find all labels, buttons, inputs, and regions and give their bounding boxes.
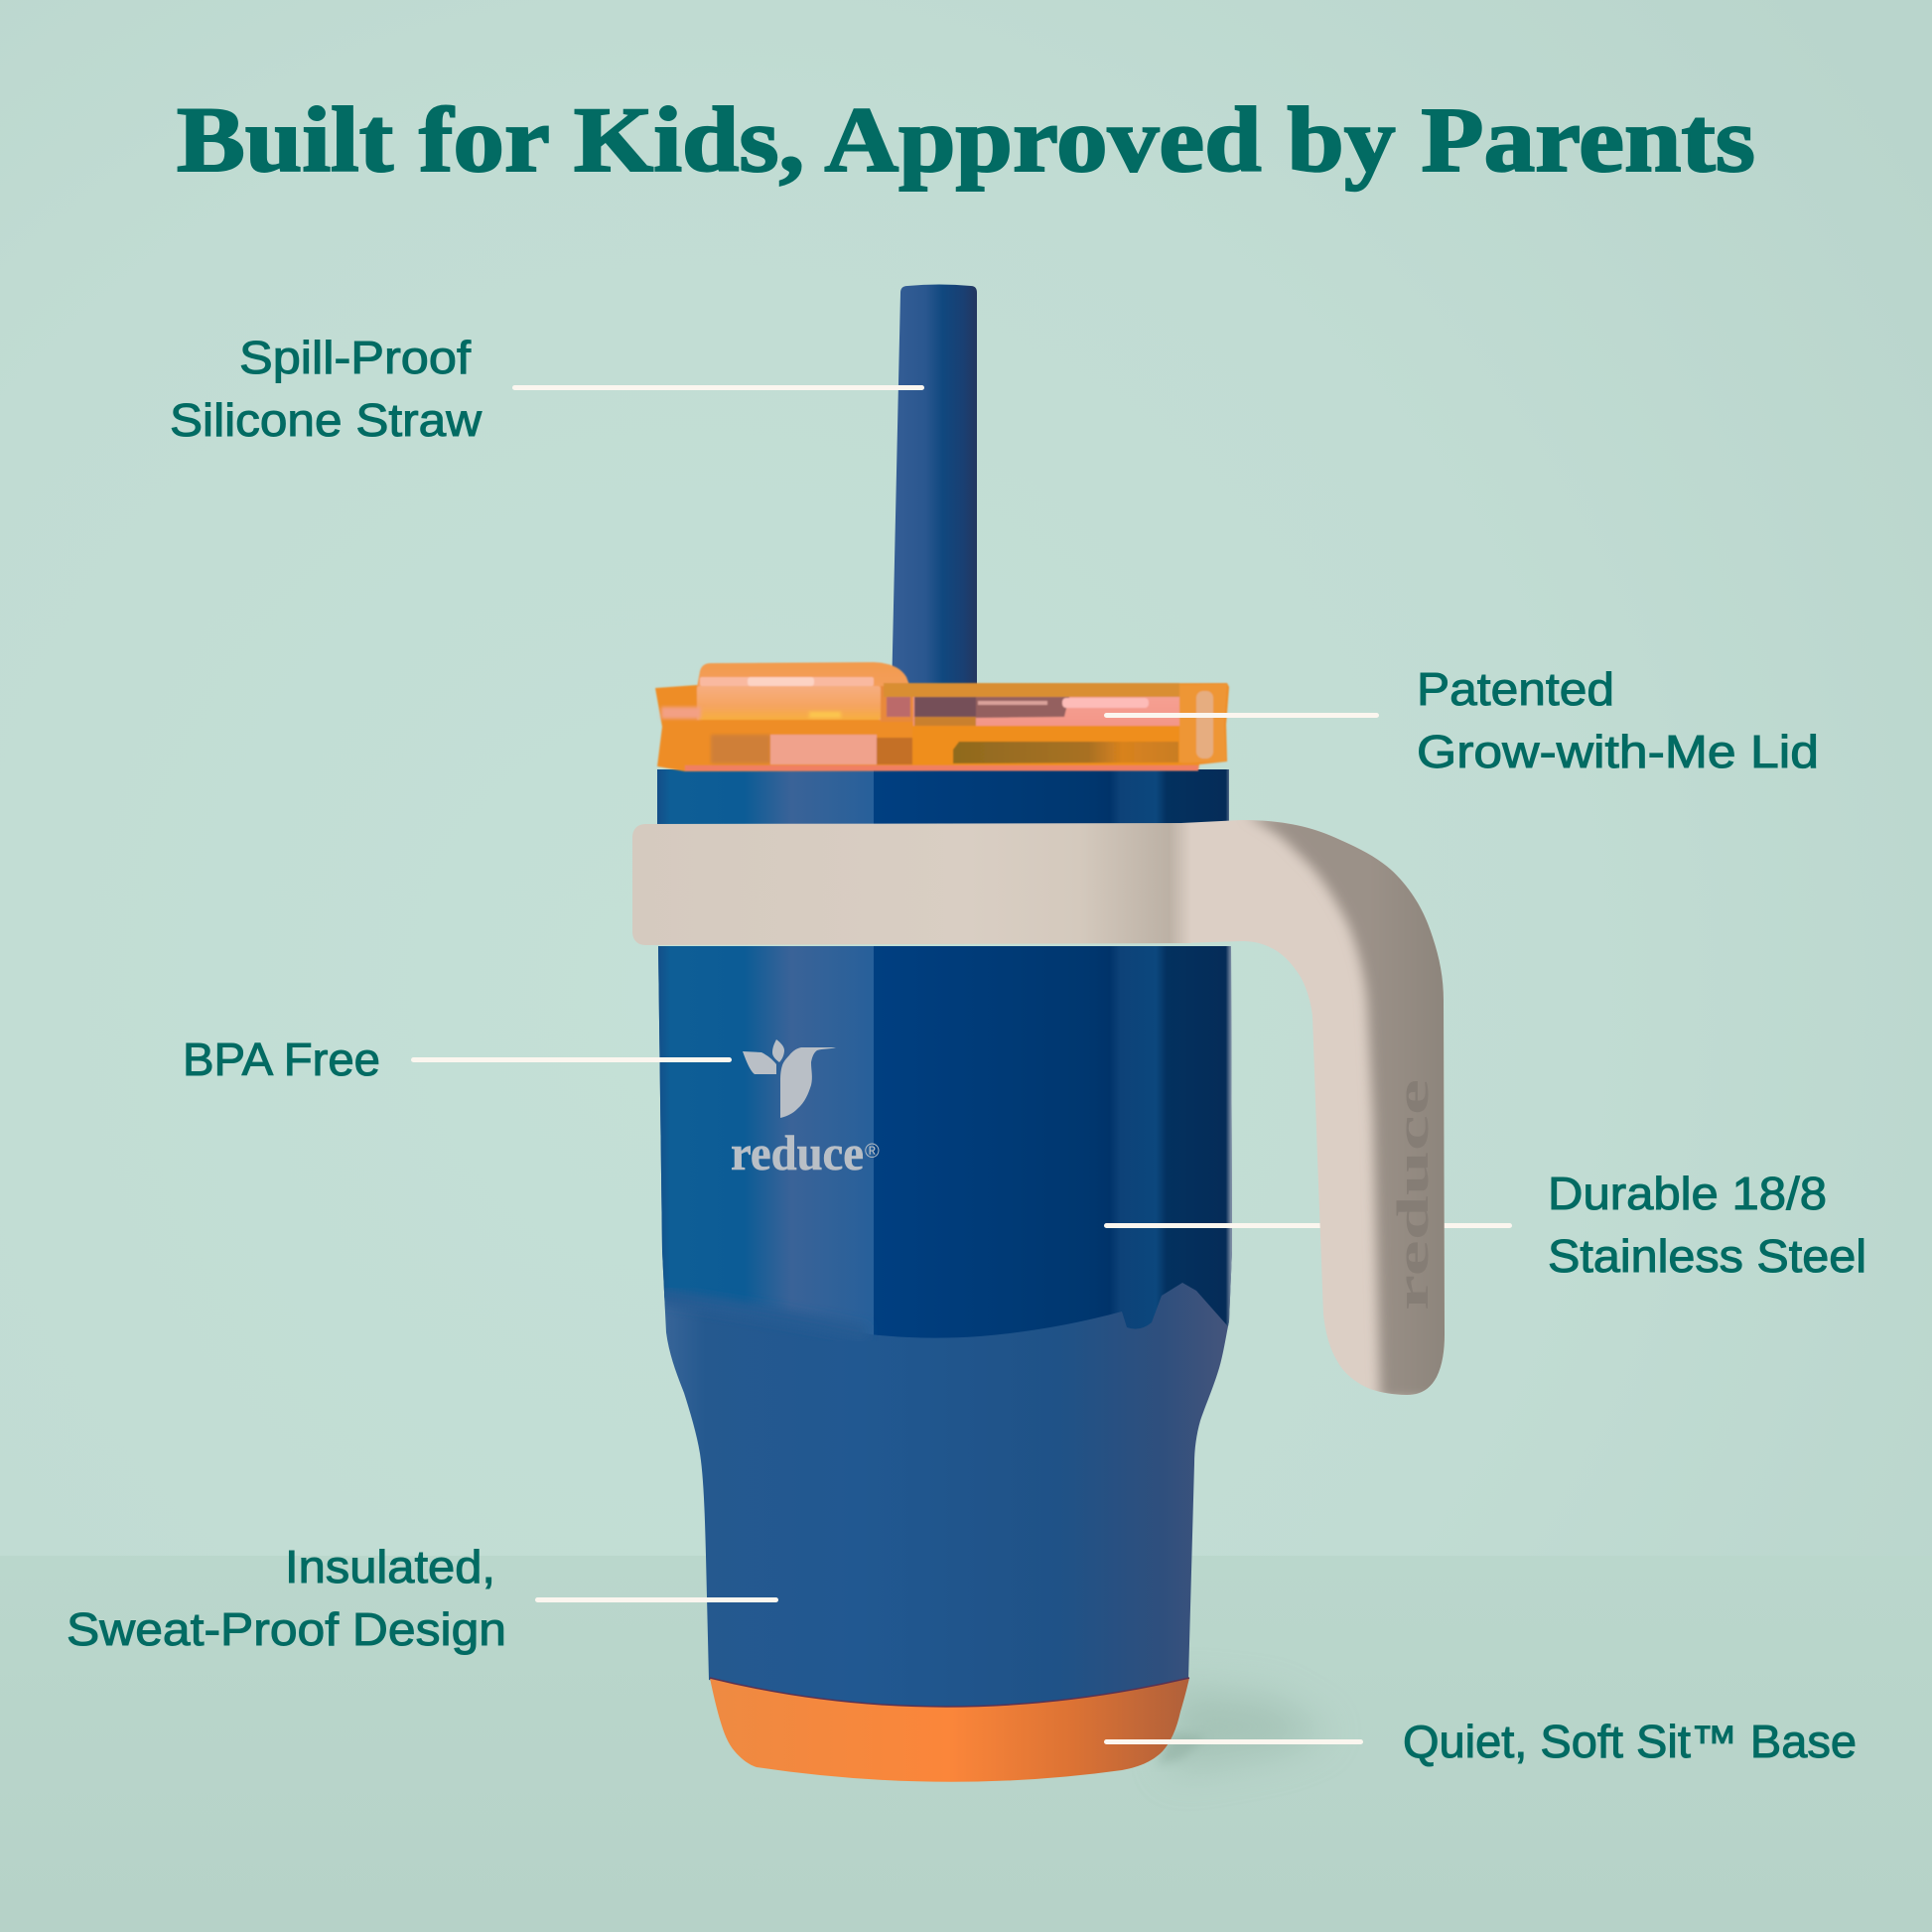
label: insulated: Sweat-Proof Design xyxy=(67,1603,506,1655)
line: lid xyxy=(1104,713,1379,718)
lid hinge band xyxy=(881,686,913,722)
logo mark xyxy=(743,1039,836,1118)
title: Built for Kids, Approved by Parents xyxy=(177,89,1755,192)
label: patented lid: Patented xyxy=(1417,663,1614,715)
lid lower window xyxy=(953,742,1178,763)
lid flip tab xyxy=(697,662,911,720)
silicone base xyxy=(710,1678,1189,1782)
tumbler xyxy=(655,769,1233,1782)
lid xyxy=(655,662,1229,771)
logo registered mark: ® xyxy=(865,1141,880,1163)
lid highlight center xyxy=(748,677,814,686)
lid dark latch xyxy=(976,697,1069,718)
label: stainless steel: Durable 18/8 xyxy=(1548,1168,1827,1219)
lid shadow lower xyxy=(914,717,976,726)
label: spill-proof silicone straw: Spill-Proof xyxy=(239,332,471,383)
handle shading xyxy=(1246,814,1459,1400)
label: patented lid: Grow-with-Me Lid xyxy=(1417,726,1819,777)
lid top edge xyxy=(884,683,1179,697)
band xyxy=(632,823,1191,945)
brand logo xyxy=(731,1039,880,1180)
label: stainless steel xyxy=(1548,1168,1866,1282)
handle embossed logo: reduce xyxy=(1387,1079,1438,1311)
tumbler glossy upper body xyxy=(655,933,1233,1350)
lid left window edge xyxy=(877,738,912,764)
tumbler neck xyxy=(657,769,1229,827)
line: bpa free xyxy=(411,1057,732,1062)
straw xyxy=(892,284,977,695)
handle and band xyxy=(632,814,1459,1400)
background floor xyxy=(0,1556,1932,1932)
lid right end cap xyxy=(1179,684,1227,762)
label: spill-proof silicone straw xyxy=(170,332,483,446)
lid left window pink xyxy=(770,735,877,764)
line: insulated xyxy=(535,1597,778,1602)
handle arm xyxy=(1181,820,1445,1395)
tumbler lower body xyxy=(658,946,1232,1709)
label: patented lid xyxy=(1417,663,1819,777)
label: insulated xyxy=(67,1541,506,1655)
lid straw shadow xyxy=(914,697,976,717)
lid end highlight xyxy=(1196,691,1213,759)
label: spill-proof silicone straw: Silicone Straw xyxy=(170,394,483,446)
lid upper highlight xyxy=(700,677,874,686)
label: stainless steel: Stainless Steel xyxy=(1548,1230,1866,1282)
logo wordmark: reduce xyxy=(731,1125,864,1180)
callout lines xyxy=(411,385,1512,1744)
label: insulated: Insulated, xyxy=(285,1541,495,1592)
line: straw xyxy=(512,385,924,390)
lid inner window xyxy=(697,686,881,720)
lid light slot xyxy=(1062,698,1149,708)
lid bottom pink strip xyxy=(685,765,1198,770)
lid right lower block xyxy=(912,726,1181,766)
lid right clear panel xyxy=(913,696,1180,726)
lid latch highlight xyxy=(978,701,1047,705)
lid hinge dark xyxy=(887,697,910,717)
lid amber glow xyxy=(809,712,841,718)
lid left pink smudge xyxy=(661,707,701,719)
line: steel xyxy=(1104,1223,1512,1228)
soft gloss edge xyxy=(655,1296,868,1333)
floor shadow xyxy=(1157,1688,1330,1772)
label: bpa free: BPA Free xyxy=(183,1034,380,1085)
label: soft sit base: Quiet, Soft Sit™ Base xyxy=(1403,1716,1857,1767)
line: base xyxy=(1104,1739,1363,1744)
lid main shell xyxy=(655,683,1229,771)
lid left window brown xyxy=(711,735,770,763)
base seam xyxy=(710,1678,1189,1707)
